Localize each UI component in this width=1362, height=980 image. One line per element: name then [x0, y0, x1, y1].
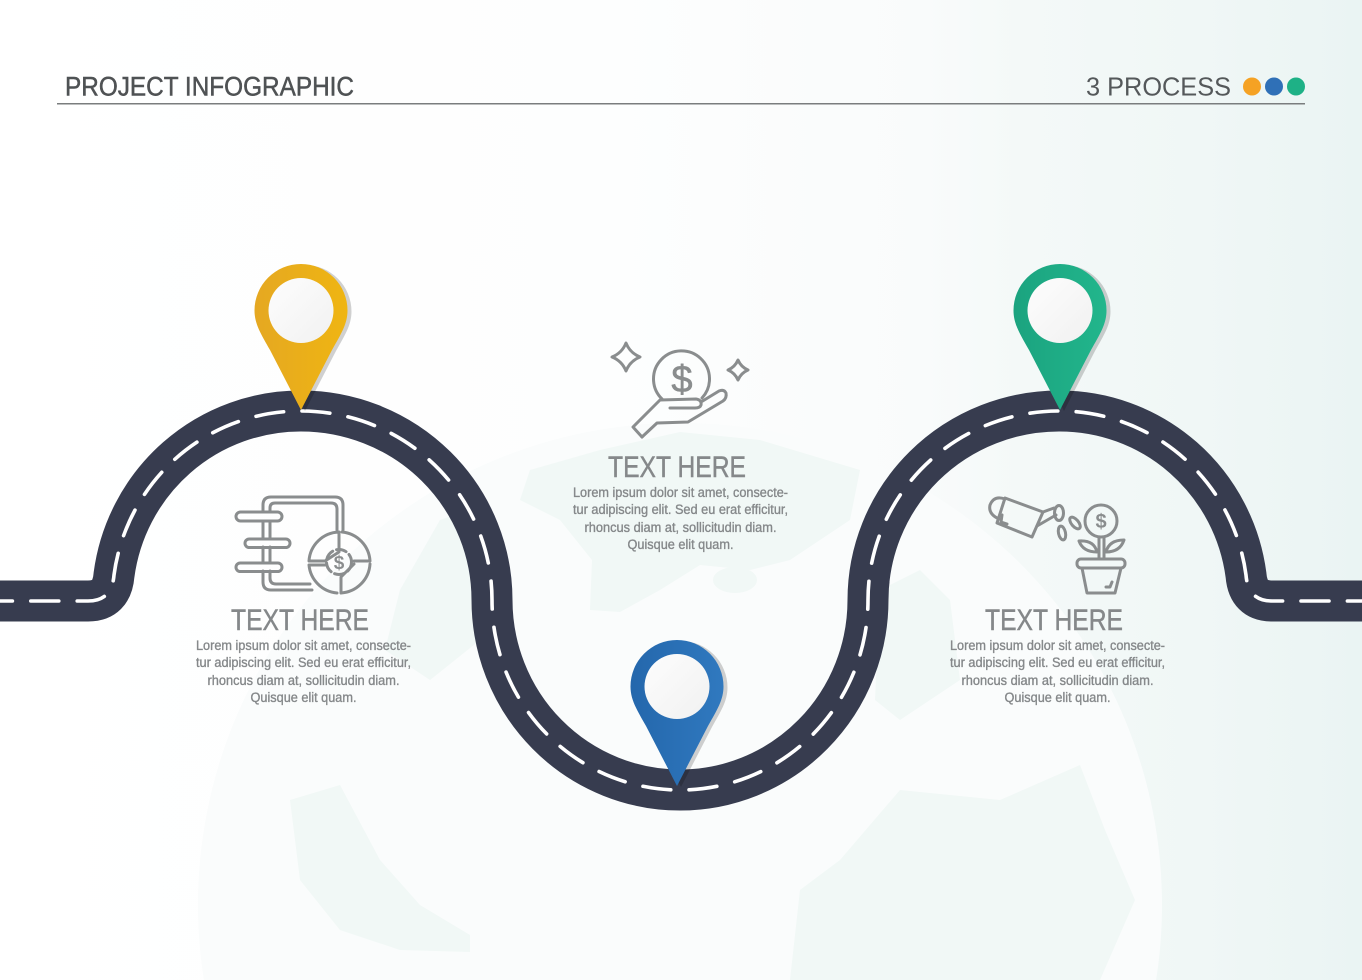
text block: step 3 — [950, 638, 1165, 705]
text block: step 2 — [573, 485, 788, 552]
icon: target and dollar: $ — [334, 553, 345, 574]
text block: step 1: Quisque elit quam. — [250, 690, 356, 705]
icon: target and dollar — [236, 497, 370, 593]
icon: watering can and money plant: $ — [1095, 511, 1107, 533]
process label: 3 PROCESS — [1086, 72, 1231, 102]
winding road — [0, 411, 1362, 790]
text block: step 1: rhoncus diam at, sollicitudin diam. — [208, 673, 400, 688]
text block: step 2: tur adipiscing elit. Sed eu erat efficitur, — [573, 502, 788, 517]
text block: step 2: Quisque elit quam. — [628, 537, 734, 552]
process dots — [1243, 78, 1305, 96]
heading: step 2: TEXT HERE — [608, 451, 746, 484]
text block: step 3: Quisque elit quam. — [1004, 690, 1110, 705]
text block: step 3: tur adipiscing elit. Sed eu erat efficitur, — [950, 655, 1165, 670]
pin: blue — [630, 640, 728, 787]
heading: step 1: TEXT HERE — [231, 604, 369, 637]
text block: step 1: tur adipiscing elit. Sed eu erat efficitur, — [196, 655, 411, 670]
text block: step 2: Lorem ipsum dolor sit amet, consecte- — [573, 485, 788, 500]
icon: watering can and money plant — [990, 498, 1125, 593]
title: PROJECT INFOGRAPHIC — [65, 72, 354, 102]
text block: step 3: rhoncus diam at, sollicitudin diam. — [962, 673, 1154, 688]
pin: green — [1014, 264, 1110, 411]
text block: step 3: Lorem ipsum dolor sit amet, consecte- — [950, 638, 1165, 653]
icon: hand holding coin: $ — [671, 359, 693, 401]
text block: step 1 — [196, 638, 411, 705]
text block: step 1: Lorem ipsum dolor sit amet, consecte- — [196, 638, 411, 653]
heading: step 3: TEXT HERE — [985, 604, 1123, 637]
world globe background — [198, 423, 1162, 980]
pin: yellow — [254, 264, 352, 411]
icon: hand holding coin — [612, 343, 748, 437]
text block: step 2: rhoncus diam at, sollicitudin diam. — [584, 520, 776, 535]
